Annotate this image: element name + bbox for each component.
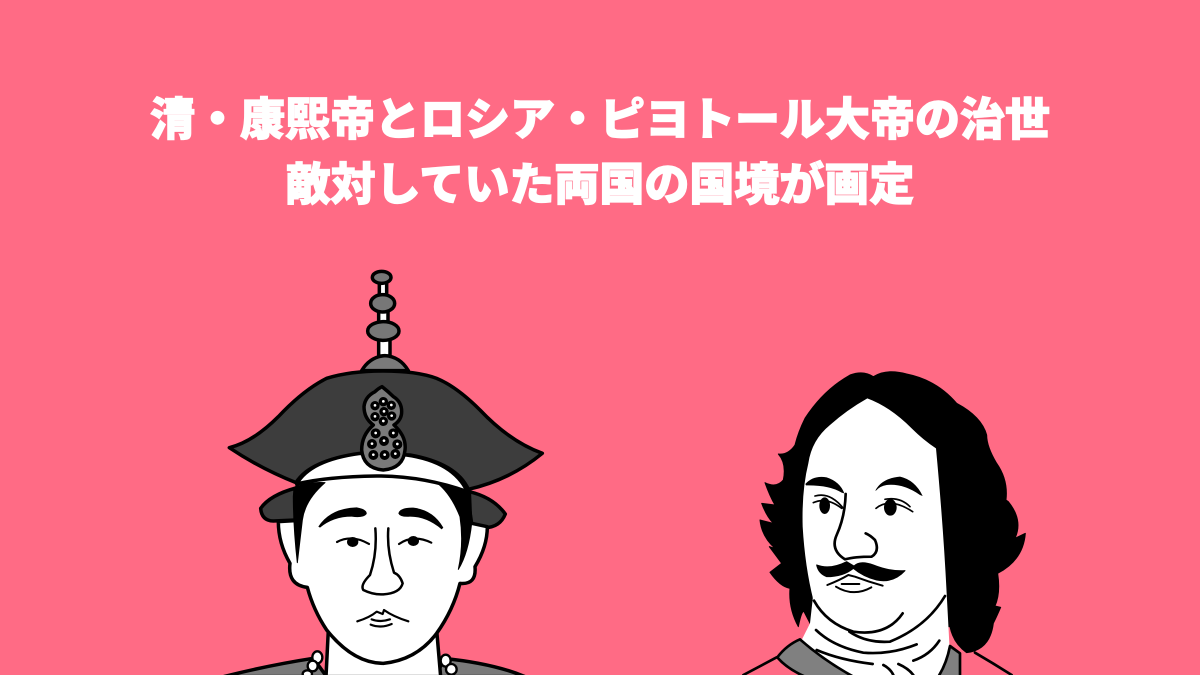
- jaw and neck folds: [814, 596, 945, 675]
- mouth: [827, 575, 883, 592]
- neck: [326, 630, 441, 675]
- side brim: [261, 488, 505, 528]
- finial: [362, 271, 408, 371]
- bead necklace: [303, 651, 457, 675]
- eyes: [337, 538, 431, 544]
- hat crown: [229, 371, 542, 489]
- moustache: [817, 562, 905, 581]
- portrait: Peter the Great: [743, 372, 1025, 675]
- grey collar: [777, 639, 960, 675]
- title: 敵対していた両国の国境が画定: [286, 159, 914, 210]
- shoulders: [743, 653, 1012, 675]
- portrait: Kangxi Emperor: [223, 271, 542, 675]
- gourd ornament: [362, 387, 405, 470]
- face: [803, 398, 947, 632]
- hat band: [297, 453, 467, 492]
- nose: [835, 494, 877, 559]
- nose: [362, 528, 403, 594]
- shoulders and robe: [223, 658, 525, 675]
- title: [150, 94, 1050, 210]
- mouth: [357, 610, 408, 627]
- hair: [760, 372, 1025, 653]
- ears and face: [278, 473, 487, 663]
- neck and cravat: [802, 593, 952, 675]
- eyebrows: [805, 477, 923, 496]
- eyes: [813, 495, 913, 512]
- hair sideburns: [293, 483, 472, 569]
- eyebrows: [318, 507, 443, 529]
- title: 清・康熙帝とロシア・ピヨトール大帝の治世: [150, 94, 1050, 145]
